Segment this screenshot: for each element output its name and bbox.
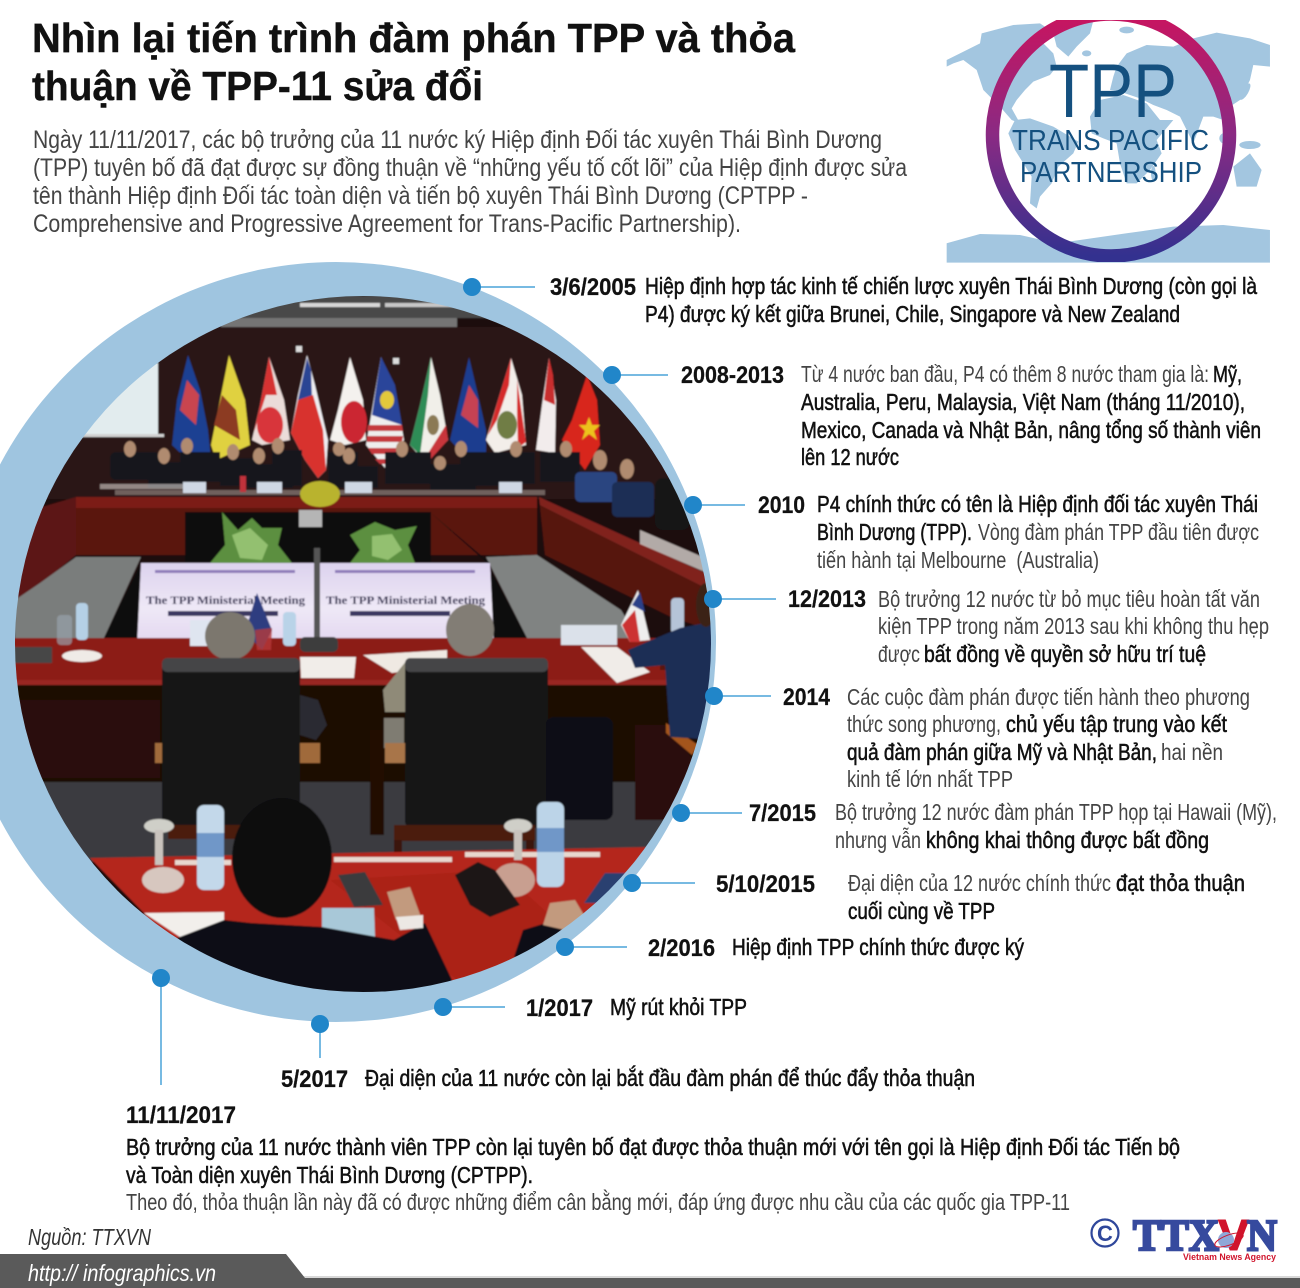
circular ring <box>0 262 716 1022</box>
event: 5/10/2015 <box>716 870 1245 924</box>
event: 2008-2013 <box>681 361 1261 470</box>
chairs <box>155 743 320 763</box>
event: 7/2015: nhưng vẫn <box>835 827 921 853</box>
agency wordmark: TTX <box>1133 1211 1219 1260</box>
event: 2014: 2014 <box>783 684 831 711</box>
event: 2014: quả đàm phán giữa Mỹ và Nhật Bản, <box>847 739 1157 765</box>
timeline markers <box>152 278 776 1085</box>
meeting photo: The TPP Ministerial Meeting <box>146 593 305 607</box>
event: 2/2016: Hiệp định TPP chính thức được ký <box>732 934 1024 960</box>
title: Nhìn lại tiến trình đàm phán TPP và thỏa <box>32 15 796 61</box>
event: 2/2016: 2/2016 <box>648 935 715 962</box>
event: 2008-2013: lên 12 nước <box>801 444 899 470</box>
event: 11/11/2017: Theo đó, thỏa thuận lần này đã có được những điểm cân bằng mới, đáp ứng được nhu cầu của các quốc gia TPP-11 <box>126 1189 1070 1215</box>
timeline dots <box>152 278 723 1033</box>
yellow flowers <box>300 481 340 507</box>
event: 3/6/2005: P4) được ký kết giữa Brunei, Chile, Singapore và New Zealand <box>645 301 1180 327</box>
front table <box>90 846 646 980</box>
event: 2014: kinh tế lớn nhất TPP <box>847 766 1013 792</box>
intro text block: (TPP) tuyên bố đã đạt được sự đồng thuận về “những yếu tố cốt lõi” của Hiệp định được sửa <box>33 154 907 182</box>
title: thuận về TPP-11 sửa đổi <box>32 63 483 109</box>
agency wordmark: V <box>1218 1211 1250 1260</box>
logo text: TPP <box>1049 49 1177 134</box>
event: 2010: tiến hành tại Melbourne (Australia) <box>817 547 1099 573</box>
floor <box>15 557 141 640</box>
event: 2010: 2010 <box>758 492 805 519</box>
logo text: TRANS PACIFIC <box>1012 125 1209 157</box>
plants <box>210 512 417 563</box>
delegates from behind <box>205 612 255 660</box>
event: 12/2013: được <box>878 641 920 667</box>
event: 11/11/2017: 11/11/2017 <box>126 1102 236 1129</box>
flags <box>171 354 212 454</box>
footer bar <box>0 1254 1300 1288</box>
event: 2010 <box>758 491 1259 573</box>
event: 2/2016 <box>648 934 1024 962</box>
front delegate <box>176 919 453 992</box>
event: 7/2015 <box>749 799 1277 853</box>
logo ring <box>992 14 1230 256</box>
Ministerial Meeting signs <box>137 563 314 645</box>
event: 12/2013: bất đồng về quyền sở hữu trí tuệ <box>924 641 1206 667</box>
footer url: http:// infographics.vn <box>28 1260 216 1286</box>
agency wordmark: Vietnam News Agency <box>1183 1252 1277 1263</box>
event: 1/2017 <box>526 994 747 1022</box>
intro text block: tên thành Hiệp định Đối tác toàn diện và tiến bộ xuyên Thái Bình Dương (CPTPP - <box>33 182 808 210</box>
intro text block <box>33 126 907 238</box>
logo text <box>1012 49 1209 189</box>
table items <box>300 657 356 678</box>
event: 1/2017: 1/2017 <box>526 995 593 1022</box>
TTXVN logo <box>1092 1211 1277 1263</box>
back and side tables <box>76 508 538 556</box>
event: 12/2013 <box>788 586 1269 667</box>
intro text block: Ngày 11/11/2017, các bộ trưởng của 11 nước ký Hiệp định Đối tác xuyên Thái Bình Dương <box>33 126 882 154</box>
event: 5/2017: Đại diện của 11 nước còn lại bắt đầu đàm phán để thúc đẩy thỏa thuận <box>365 1065 975 1091</box>
intro text block: Comprehensive and Progressive Agreement for Trans-Pacific Partnership). <box>33 210 741 238</box>
agency wordmark: N <box>1247 1211 1277 1260</box>
right delegate and chair <box>635 725 693 820</box>
event: 11/11/2017 <box>126 1102 1180 1215</box>
TPP logo <box>947 14 1270 263</box>
event: 5/10/2015: Đại diện của 12 nước chính thức <box>848 870 1111 896</box>
event: 5/10/2015: đạt thỏa thuận <box>1116 870 1245 896</box>
event: 5/10/2015: 5/10/2015 <box>716 871 815 898</box>
head table delegates <box>110 450 580 490</box>
event: 2008-2013: 2008-2013 <box>681 362 784 389</box>
event: 3/6/2005: 3/6/2005 <box>550 274 636 301</box>
event: 2014: thức song phương, <box>847 711 1001 737</box>
event: 2014: chủ yếu tập trung vào kết <box>1006 711 1228 737</box>
event: 3/6/2005 <box>550 273 1257 327</box>
event: 11/11/2017: và Toàn diện xuyên Thái Bình Dương (CPTPP). <box>126 1162 533 1188</box>
title <box>32 15 796 109</box>
event: 7/2015: 7/2015 <box>749 800 816 827</box>
agency wordmark <box>1133 1211 1277 1263</box>
event: 12/2013: 12/2013 <box>788 586 866 613</box>
event: 5/10/2015: cuối cùng về TPP <box>848 898 995 924</box>
main table <box>0 638 668 685</box>
event: 2010: Bình Dương (TPP). <box>817 519 972 545</box>
copyright mark: C <box>1097 1221 1113 1246</box>
source: Nguồn: TTXVN <box>28 1224 151 1250</box>
meeting photo <box>0 290 730 1000</box>
copyright mark <box>1092 1220 1118 1246</box>
event: 2014 <box>783 684 1250 792</box>
event: 2008-2013: Mỹ, <box>1213 361 1242 387</box>
world map <box>947 21 1270 263</box>
event: 1/2017: Mỹ rút khỏi TPP <box>610 994 747 1020</box>
meeting photo: The TPP Ministerial Meeting <box>326 593 485 607</box>
logo text: PARTNERSHIP <box>1020 157 1202 189</box>
event: 5/2017: 5/2017 <box>281 1066 348 1093</box>
wall and ceiling <box>47 327 669 500</box>
event: 2014: hai nền <box>1161 739 1223 765</box>
event: 7/2015: không khai thông được bất đồng <box>926 827 1209 853</box>
glasses, bottles, headset <box>144 819 174 833</box>
